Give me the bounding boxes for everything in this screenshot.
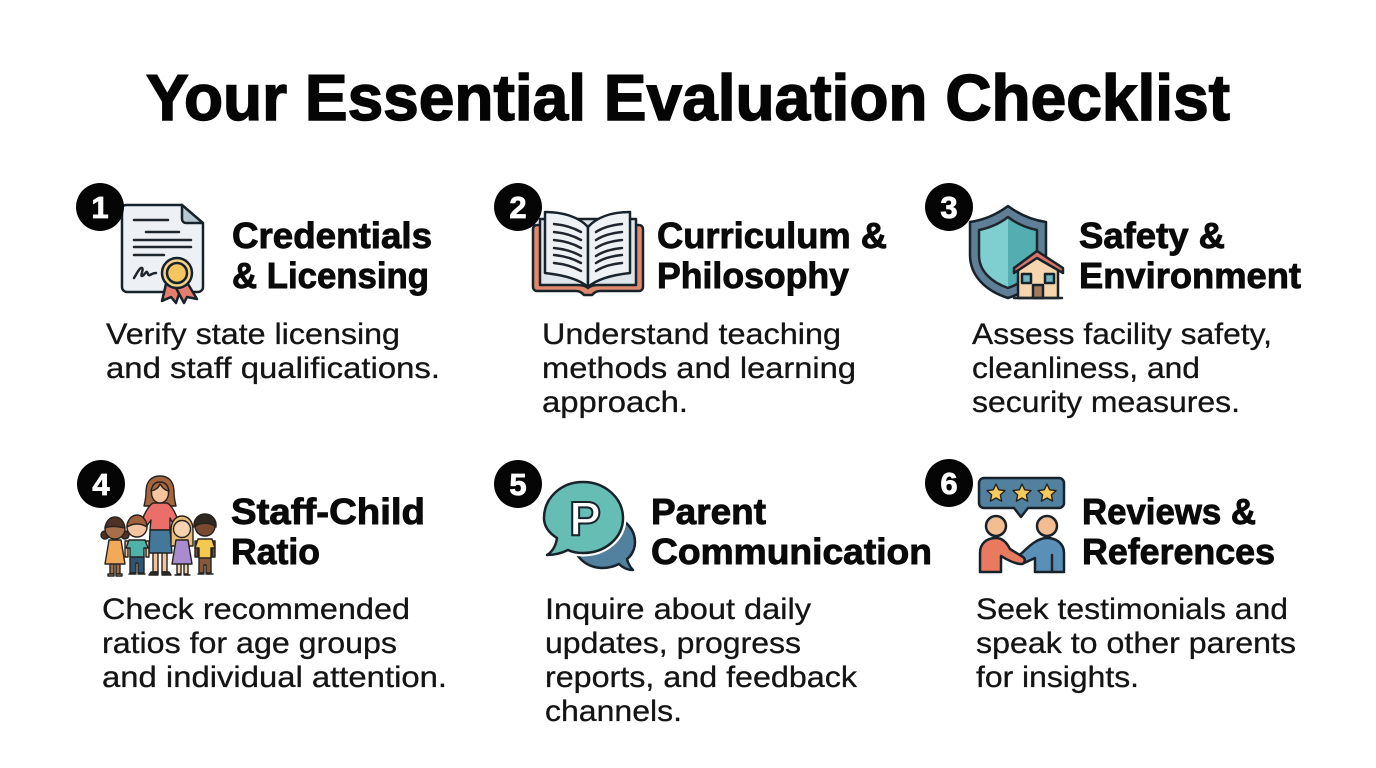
number badge 2: 2 — [509, 190, 527, 225]
heading: Credentials — [232, 215, 432, 256]
description: approach. — [542, 386, 688, 419]
number badge 1: 1 — [91, 190, 109, 225]
heading: Curriculum & — [657, 215, 887, 256]
heading: & Licensing — [232, 255, 429, 296]
description: Inquire about daily — [545, 593, 811, 626]
icon: teacher with children — [101, 476, 216, 576]
icon: certificate document — [122, 205, 203, 303]
panel: credentials and licensing — [76, 183, 440, 385]
heading — [651, 491, 932, 572]
stars — [987, 484, 1056, 501]
heading — [1079, 215, 1301, 296]
number badge 6: 6 — [940, 466, 958, 501]
description: methods and learning — [542, 352, 856, 385]
panel: parent communication — [494, 460, 932, 728]
number badge 4: 4 — [92, 467, 110, 502]
panel: safety and environment — [925, 183, 1301, 419]
teacher — [140, 476, 180, 575]
child 2 — [125, 515, 149, 574]
panel: curriculum and philosophy — [494, 183, 887, 419]
heading — [657, 215, 887, 296]
heading: Philosophy — [657, 255, 849, 296]
child 3 — [171, 516, 193, 575]
child 4 — [194, 514, 216, 574]
description: Assess facility safety, — [972, 318, 1272, 351]
description: speak to other parents — [976, 627, 1296, 660]
heading: Environment — [1079, 255, 1301, 296]
heading: Staff-Child — [231, 491, 425, 532]
number badge 3: 3 — [940, 190, 958, 225]
description — [972, 318, 1272, 419]
description: cleanliness, and — [972, 352, 1200, 385]
number badge 3 — [925, 183, 973, 231]
description: and staff qualifications. — [106, 352, 440, 385]
heading: Reviews & — [1082, 491, 1256, 532]
number badge 2 — [494, 183, 542, 231]
description: Seek testimonials and — [976, 593, 1288, 626]
description — [542, 318, 856, 419]
description: for insights. — [976, 661, 1139, 694]
heading: Communication — [651, 531, 932, 572]
heading — [1082, 491, 1275, 572]
description: updates, progress — [545, 627, 801, 660]
heading — [231, 491, 425, 572]
description: Check recommended — [102, 593, 410, 626]
number badge 5 — [494, 460, 542, 508]
icon: open book — [533, 212, 643, 295]
description — [976, 593, 1296, 694]
number badge 5: 5 — [509, 467, 527, 502]
description: ratios for age groups — [102, 627, 397, 660]
heading: Parent — [651, 491, 766, 532]
description — [545, 593, 858, 728]
description: channels. — [545, 695, 682, 728]
description: security measures. — [972, 386, 1240, 419]
description: and individual attention. — [102, 661, 447, 694]
panel: reviews and references — [925, 459, 1296, 694]
description: Verify state licensing — [106, 318, 400, 351]
letter P: P — [569, 493, 601, 546]
description — [106, 318, 440, 385]
number badge 1 — [76, 183, 124, 231]
heading: Ratio — [231, 531, 320, 572]
child 1 — [101, 517, 129, 576]
number badge 6 — [925, 459, 973, 507]
number badge 4 — [77, 460, 125, 508]
description: Understand teaching — [542, 318, 841, 351]
icon: speech bubbles — [544, 482, 635, 570]
panel: staff-child ratio — [77, 460, 447, 694]
heading — [232, 215, 432, 296]
heading: References — [1082, 531, 1275, 572]
description — [102, 593, 447, 694]
title: Your Essential Evaluation Checklist — [146, 61, 1230, 134]
description: reports, and feedback — [545, 661, 858, 694]
icon: rating and handshake — [979, 478, 1064, 572]
heading: Safety & — [1079, 215, 1225, 256]
icon: shield with house — [970, 206, 1063, 298]
